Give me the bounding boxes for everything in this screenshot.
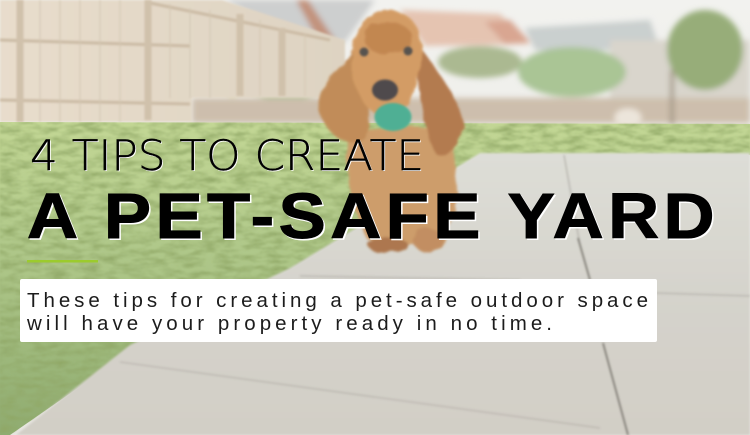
- dog body: [347, 125, 457, 248]
- title line 2: A PET-SAFE YARD: [27, 180, 719, 252]
- title line 1: 4 TIPS TO CREATE: [30, 131, 424, 180]
- title line 1: 4 TIPS TO CREATE: [31, 132, 425, 181]
- title line 2: A PET-SAFE YARD: [28, 182, 720, 254]
- dog running with ball: [319, 11, 463, 253]
- patio: [16, 153, 750, 435]
- intro panel: [20, 279, 657, 342]
- lawn: [0, 122, 750, 435]
- ball: [374, 103, 412, 131]
- intro text: These tips for creating a pet-safe outdoor space: [27, 289, 648, 312]
- green accent line: [27, 260, 98, 262]
- dog left ear: [319, 50, 369, 143]
- dog head: [352, 11, 421, 117]
- dog eyes: [360, 46, 412, 56]
- dog nose: [372, 80, 398, 100]
- intro text: [26, 289, 648, 335]
- intro text: will have your property ready in no time.: [26, 312, 552, 335]
- dog right ear: [418, 45, 463, 157]
- dog paws: [368, 237, 408, 253]
